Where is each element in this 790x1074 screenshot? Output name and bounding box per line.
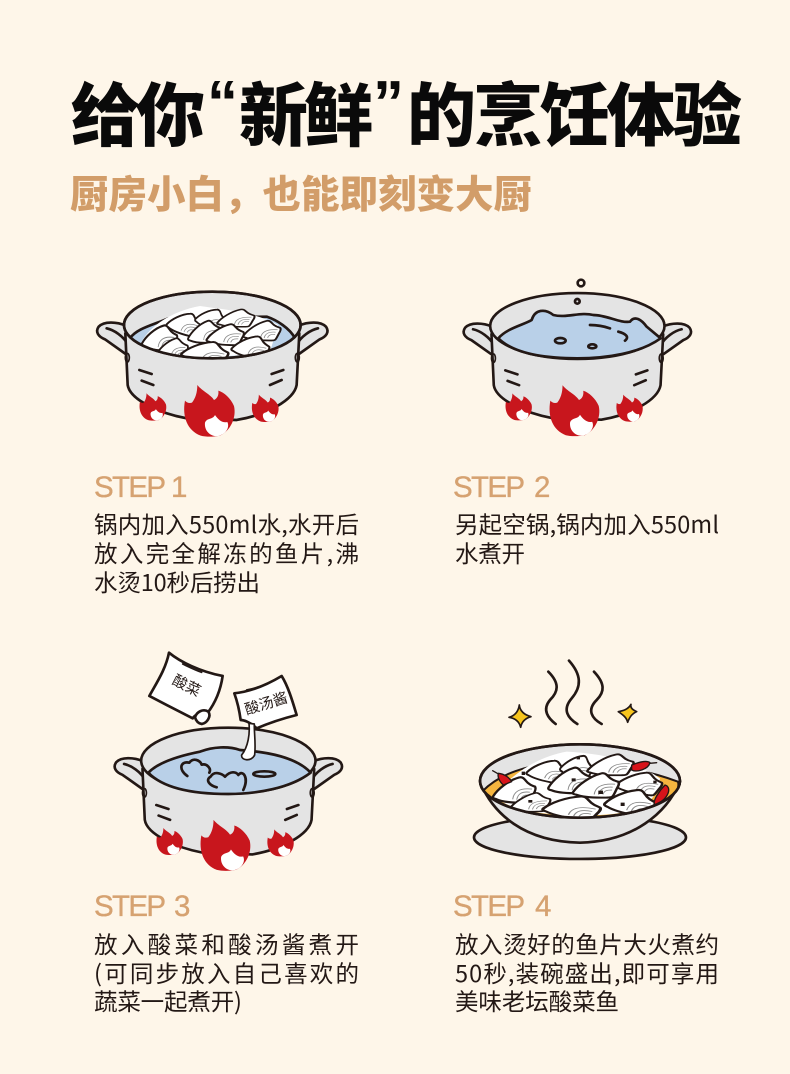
title <box>71 60 742 160</box>
pack: suan tang jiang <box>234 676 297 728</box>
illustration: finished bowl of fish <box>474 661 686 859</box>
subtitle: 厨房小白，也能即刻变大厨 <box>70 164 532 220</box>
step 2 label: STEP <box>453 471 525 504</box>
step 3 text: (可同步放入自己喜欢的 <box>94 955 359 989</box>
title: 新鲜 <box>239 60 373 160</box>
title: “ <box>207 69 238 138</box>
step 3 text <box>94 926 359 1017</box>
step 3 text: 蔬菜一起煮开) <box>94 983 242 1017</box>
bubbles and ripples <box>555 280 627 348</box>
step 1 text: 放入完全解冻的鱼片,沸 <box>94 535 359 569</box>
step 4 label: 4 <box>535 890 551 923</box>
step 3 label: 3 <box>174 890 190 923</box>
step 2 text <box>455 506 719 569</box>
step 3 label: STEP <box>94 890 166 923</box>
plate <box>474 816 686 859</box>
pack: suan cai <box>149 653 223 724</box>
illustration: adding seasoning packs to pot <box>115 653 342 871</box>
water <box>498 311 661 358</box>
title: 给你 <box>71 60 205 160</box>
soup, chilies and fish <box>482 752 678 822</box>
pack: suan tang jiang: 酸汤酱 <box>242 687 290 720</box>
step 4 text: 美味老坛酸菜鱼 <box>455 983 619 1017</box>
title: ” <box>373 69 404 138</box>
step 1 text: 水烫10秒后捞出 <box>94 564 260 598</box>
step 4 label: STEP <box>453 890 525 923</box>
vegetables and ripple <box>181 760 275 790</box>
step 4 text: 放入烫好的鱼片大火煮约 <box>455 926 719 960</box>
sauce stream <box>242 723 255 760</box>
chilies <box>632 761 650 771</box>
step 2 label: 2 <box>534 471 550 504</box>
step 2 text: 水煮开 <box>455 535 525 569</box>
step 1 label: 1 <box>171 471 187 504</box>
step 3 text: 放入酸菜和酸汤酱煮开 <box>94 926 359 960</box>
steam <box>546 661 603 724</box>
bowl <box>481 782 680 843</box>
water and fish <box>130 306 294 357</box>
title: 的烹饪体验 <box>407 60 742 160</box>
water <box>148 747 311 794</box>
illustration: boiling water pot <box>464 280 691 436</box>
step 1 label: STEP <box>94 471 166 504</box>
step 2 text: 另起空锅,锅内加入550ml <box>455 506 719 540</box>
small dark marks on fish <box>522 757 657 806</box>
illustration: pot with fish slices <box>97 292 327 437</box>
pot <box>115 728 342 871</box>
step 1 text: 锅内加入550ml水,水开后 <box>94 506 359 540</box>
sparkles <box>509 705 531 727</box>
step 4 text: 50秒,装碗盛出,即可享用 <box>455 955 719 989</box>
step 1 text <box>94 506 359 598</box>
step 4 text <box>455 926 719 1017</box>
pack: suan cai: 酸菜 <box>169 669 205 701</box>
